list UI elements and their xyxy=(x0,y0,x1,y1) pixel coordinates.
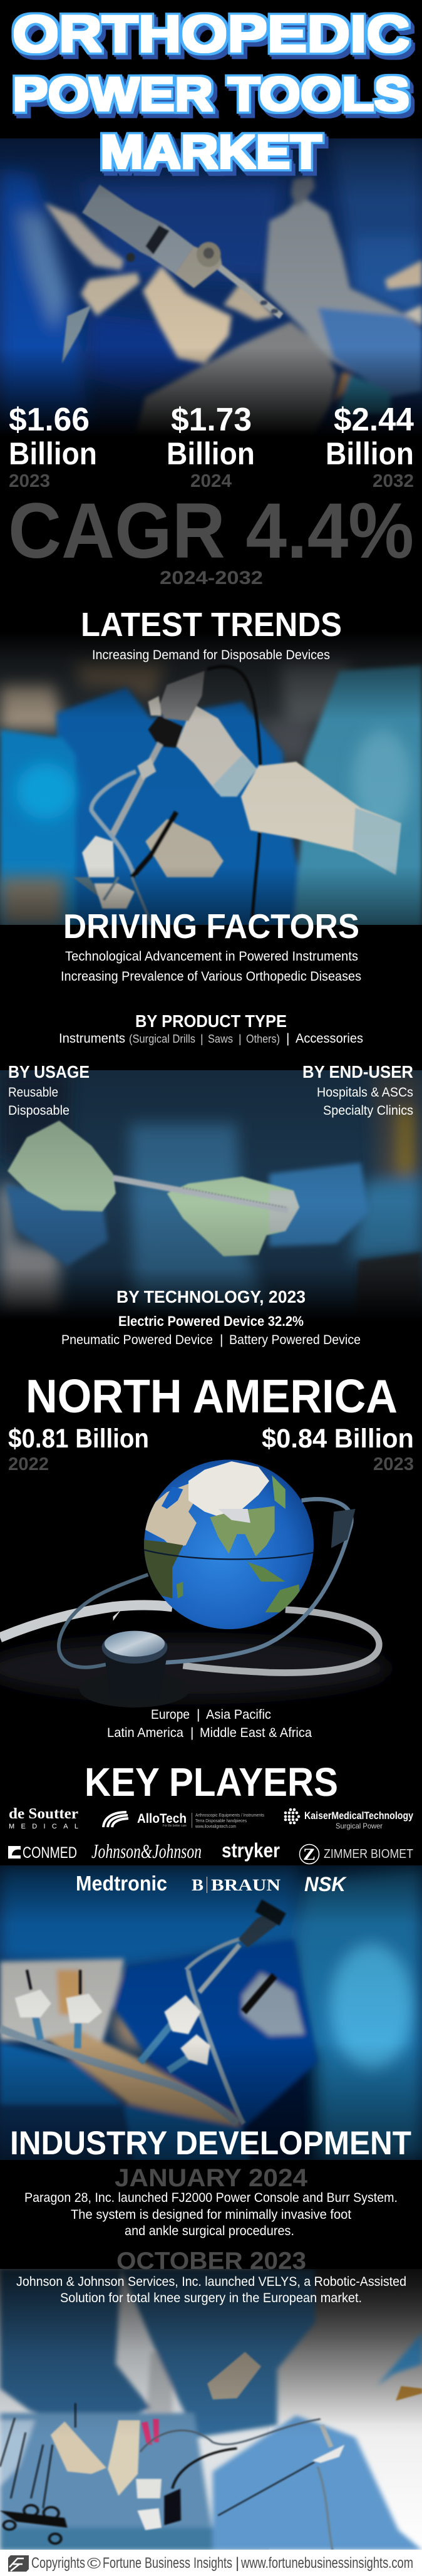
development: October 2023 xyxy=(16,2248,406,2305)
segment: by technology: BY TECHNOLOGY, 2023 xyxy=(116,1287,306,1306)
logo: Kaiser Medical Technology: Surgical Power xyxy=(336,1822,383,1830)
stat: 2023 market size: $1.66 xyxy=(9,402,90,438)
logo: Kaiser Medical Technology xyxy=(284,1808,413,1830)
segment: by product type xyxy=(59,1011,363,1046)
logo: AlloTech: For the better care xyxy=(163,1824,187,1828)
segment: by product type: (Surgical Drills xyxy=(129,1033,195,1045)
segment: by product type: BY PRODUCT TYPE xyxy=(135,1011,287,1031)
text: other regions: Middle East & Africa xyxy=(200,1726,312,1740)
logo: ConMed: CONMED xyxy=(23,1844,77,1862)
stat: 2023 market size xyxy=(9,402,97,491)
stat: 2023 market size: Billion xyxy=(9,436,97,471)
text: other regions: Europe xyxy=(151,1708,190,1722)
development: October 2023: OCTOBER 2023 xyxy=(116,2248,306,2275)
text: driving factors detail xyxy=(61,949,361,984)
segment: by product type: Others) xyxy=(246,1033,280,1045)
text: other regions: Latin America xyxy=(107,1726,183,1740)
logo: AlloTech: Arthroscopic Equipments / Instruments xyxy=(195,1813,264,1818)
segment: by technology: | xyxy=(220,1333,223,1347)
logo: de Soutter Medical: de Soutter xyxy=(9,1806,78,1822)
icon: Fortune Business Insights logo xyxy=(8,2555,29,2572)
segment: by end-user: Specialty Clinics xyxy=(323,1103,413,1118)
CAGR figure: 2024-2032 xyxy=(160,568,263,588)
text: copyright line: Fortune Business Insights xyxy=(103,2555,232,2572)
logo: Medtronic: Medtronic xyxy=(76,1872,167,1895)
segment: by technology: Electric Powered Device 32.2% xyxy=(118,1313,304,1329)
logo: AlloTech: www.ilovealigntech.com xyxy=(195,1825,236,1829)
stat: 2032 market size: 2032 xyxy=(373,471,414,491)
heading: key players: KEY PLAYERS xyxy=(85,1760,338,1805)
logo: de Soutter Medical xyxy=(9,1806,78,1830)
logo: NSK: NSK xyxy=(304,1873,347,1895)
logo: B. Braun: B xyxy=(192,1876,203,1894)
development: October 2023: Johnson & Johnson Services, Inc. launched VELYS, a Robotic-Assisted xyxy=(16,2275,406,2289)
development: January 2024 xyxy=(24,2164,398,2238)
text: other regions: Asia Pacific xyxy=(206,1708,271,1722)
segment: by end-user: BY END-USER xyxy=(302,1062,413,1082)
segment: by product type: Accessories xyxy=(296,1031,363,1046)
logo: Stryker: stryker xyxy=(222,1839,280,1862)
development: January 2024: JANUARY 2024 xyxy=(115,2164,308,2192)
photo: surgeon holding arthroscope xyxy=(0,632,422,928)
stat: 2024 market size: 2024 xyxy=(190,471,232,491)
text: other regions: | xyxy=(190,1726,193,1740)
stat: north america 2023: 2023 xyxy=(373,1454,414,1474)
title xyxy=(13,6,409,178)
stat: 2024 market size: $1.73 xyxy=(171,402,252,438)
logo: Zimmer Biomet xyxy=(299,1845,413,1864)
stat: north america 2023: $0.84 Billion xyxy=(262,1424,414,1454)
segment: by product type: | xyxy=(200,1033,203,1045)
text: copyright line: © xyxy=(87,2555,101,2572)
stat: 2032 market size xyxy=(326,402,414,491)
segment: by technology: Battery Powered Device xyxy=(229,1333,361,1347)
segment: by usage: BY USAGE xyxy=(8,1062,90,1082)
title: MARKET xyxy=(100,125,322,178)
logo: de Soutter Medical: MEDICAL xyxy=(9,1823,78,1830)
development: October 2023: Solution for total knee surgery in the European market. xyxy=(60,2291,362,2305)
text: copyright line: | xyxy=(235,2555,239,2572)
illustration: globe with stethoscope xyxy=(0,1459,391,1708)
stat: 2032 market size: Billion xyxy=(326,436,414,471)
segment: by product type: Instruments xyxy=(59,1031,125,1046)
stat: north america 2023 xyxy=(262,1424,414,1474)
logo: Zimmer Biomet: ZIMMER BIOMET xyxy=(324,1847,413,1861)
text: other regions: | xyxy=(197,1708,200,1722)
photo: surgeon holding perforated steel instrument xyxy=(0,1070,422,1339)
logo: Johnson & Johnson: Johnson&Johnson xyxy=(91,1840,202,1862)
photo: surgeon hands holding orthopedic drill xyxy=(0,138,422,446)
text: driving factors detail: Increasing Prevalence of Various Orthopedic Diseases xyxy=(61,969,361,984)
development: January 2024: The system is designed for minimally invasive foot xyxy=(71,2208,351,2222)
logo: B. Braun: BRAUN xyxy=(211,1876,280,1894)
logo: AlloTech xyxy=(103,1812,264,1829)
text: other regions xyxy=(107,1708,312,1740)
segment: by end-user xyxy=(302,1062,413,1118)
photo: surgeons with instrument tray xyxy=(0,2269,422,2552)
logo: B. Braun xyxy=(192,1876,280,1894)
title: POWER TOOLS xyxy=(13,68,409,120)
segment: by product type: | xyxy=(239,1033,242,1045)
text: driving factors detail: Technological Advancement in Powered Instruments xyxy=(65,949,358,964)
stat: north america 2022 xyxy=(8,1424,149,1474)
segment: by end-user: Hospitals & ASCs xyxy=(317,1085,413,1100)
footer bar xyxy=(0,2550,422,2576)
logo: Zimmer Biomet: Z xyxy=(303,1845,316,1864)
segment: by technology: Pneumatic Powered Device xyxy=(61,1333,213,1347)
text: copyright line xyxy=(31,2555,413,2572)
heading: latest trends: LATEST TRENDS xyxy=(81,606,342,644)
stat: 2024 market size xyxy=(167,402,255,491)
text: copyright line: Copyrights xyxy=(31,2555,85,2572)
stat: 2024 market size: Billion xyxy=(167,436,255,471)
logo: AlloTech: Terra Disposable handpieces xyxy=(195,1819,247,1823)
segment: by usage xyxy=(8,1062,90,1118)
segment: by product type: Saws xyxy=(208,1033,233,1045)
segment: by product type: | xyxy=(286,1031,289,1046)
logo: ConMed xyxy=(8,1844,77,1862)
title: ORTHOPEDIC xyxy=(13,6,409,63)
development: January 2024: Paragon 28, Inc. launched FJ2000 Power Console and Burr System. xyxy=(24,2191,398,2205)
heading: driving factors: DRIVING FACTORS xyxy=(63,907,359,946)
stat: north america 2022: 2022 xyxy=(8,1454,49,1474)
stat: north america 2022: $0.81 Billion xyxy=(8,1424,149,1454)
stat: 2032 market size: $2.44 xyxy=(334,402,414,438)
development: January 2024: and ankle surgical procedures. xyxy=(125,2224,294,2238)
segment: by technology xyxy=(61,1287,361,1347)
photo: laparoscopic ports xyxy=(0,1865,422,2163)
logo: AlloTech: AlloTech xyxy=(137,1812,187,1826)
segment: by usage: Disposable xyxy=(8,1103,69,1118)
text: latest trends detail: Increasing Demand for Disposable Devices xyxy=(92,648,330,662)
stat: 2023 market size: 2023 xyxy=(9,471,50,491)
segment: by usage: Reusable xyxy=(8,1085,58,1100)
heading: north america: NORTH AMERICA xyxy=(26,1370,398,1422)
logos: key players xyxy=(8,1806,413,1895)
